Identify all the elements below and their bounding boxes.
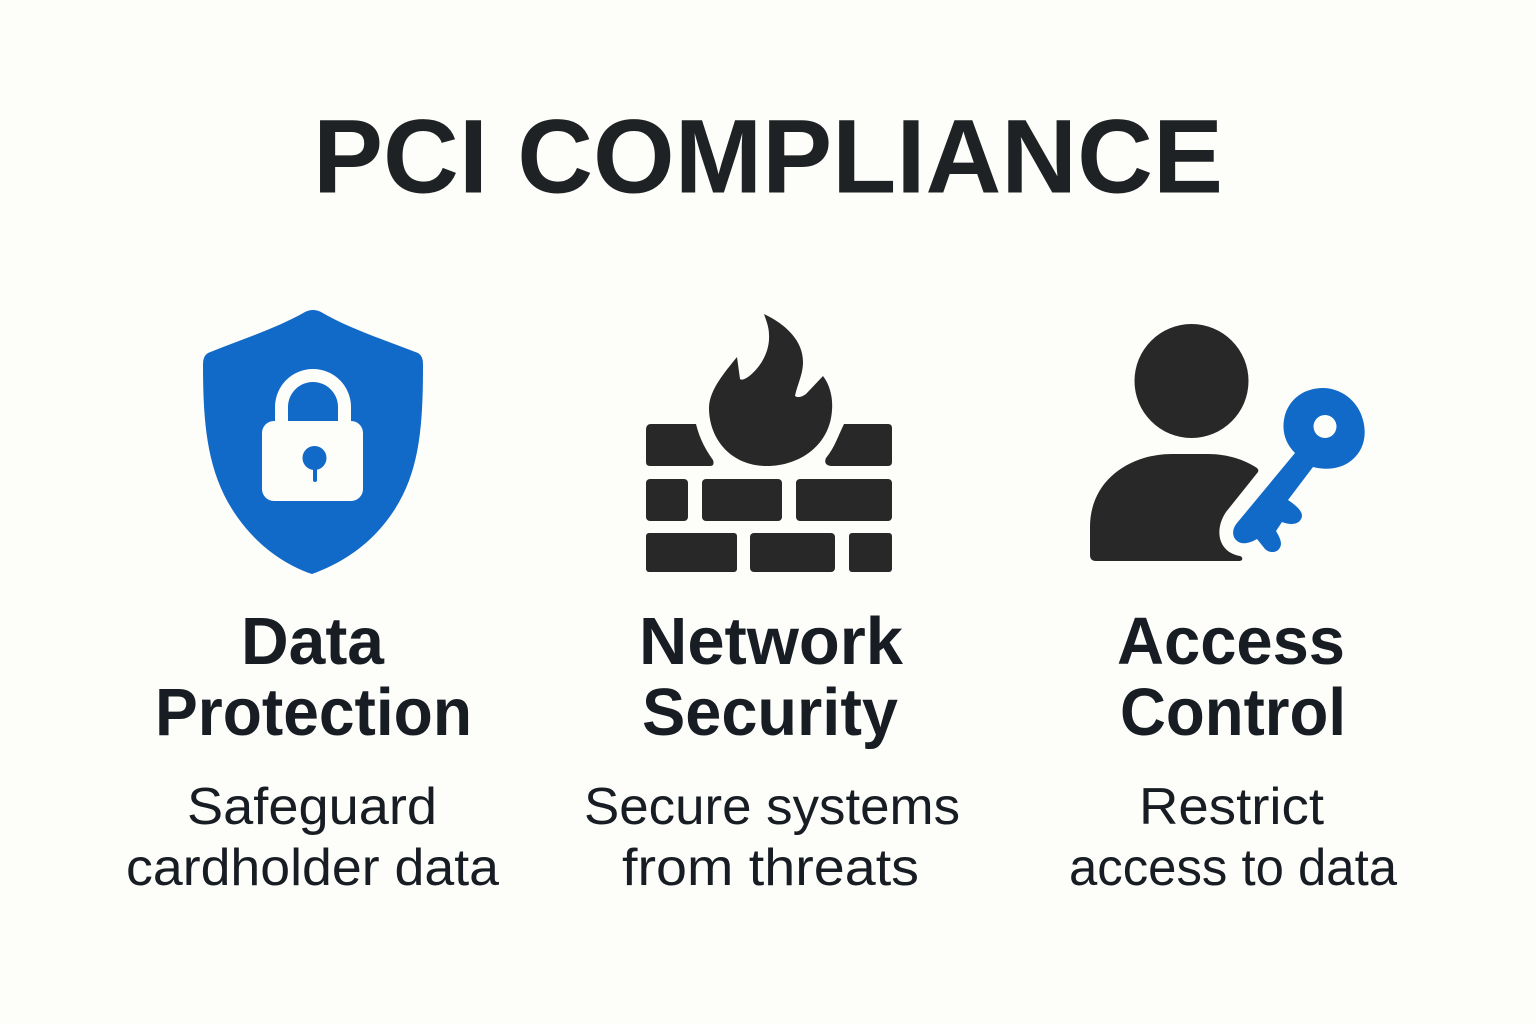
heading: data protection (155, 604, 472, 750)
icon: key (1233, 388, 1365, 552)
icon: person with key (1090, 324, 1365, 561)
description: network security: Secure systems (584, 778, 960, 836)
panel: data protection (126, 310, 499, 897)
description: access control: Restrict (1139, 778, 1325, 836)
heading: data protection: Protection (155, 675, 472, 750)
icon: firewall with flame (646, 314, 892, 572)
heading: access control (1117, 604, 1346, 750)
heading: data protection: Data (241, 604, 385, 679)
description: access control (1069, 778, 1397, 897)
icon: shield with padlock (203, 310, 423, 574)
description: access control: access to data (1069, 839, 1397, 897)
heading: access control: Control (1120, 675, 1346, 750)
title: PCI COMPLIANCE (313, 98, 1223, 216)
heading: network security: Network (639, 604, 904, 679)
heading: access control: Access (1117, 604, 1345, 679)
heading: network security (639, 604, 904, 750)
description: network security: from threats (622, 839, 919, 897)
description: network security (584, 778, 960, 897)
description: data protection: cardholder data (126, 839, 499, 897)
panel: network security (584, 314, 960, 897)
heading: network security: Security (642, 675, 898, 750)
description: data protection (126, 778, 499, 897)
description: data protection: Safeguard (187, 778, 437, 836)
panel: access control (1069, 324, 1397, 897)
